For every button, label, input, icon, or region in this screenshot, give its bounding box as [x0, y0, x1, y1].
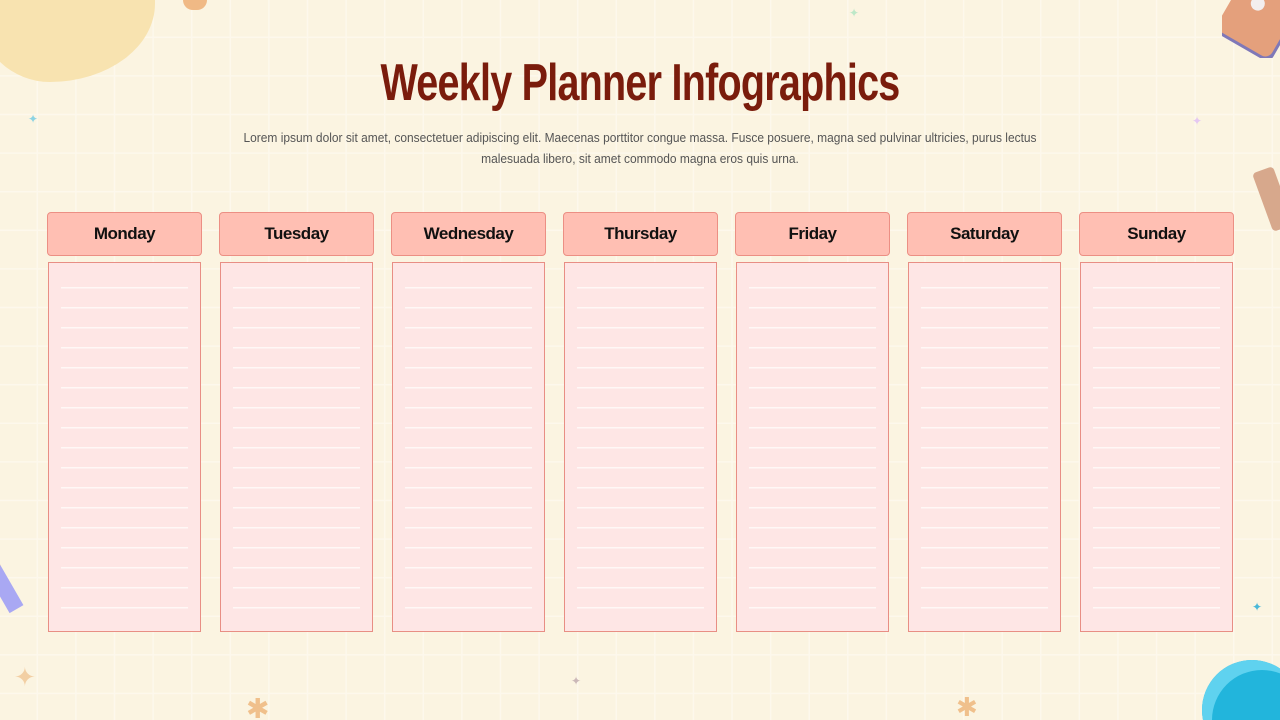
- icon: blue ball bottom-right: [1202, 660, 1280, 720]
- text: ✦: [849, 6, 859, 20]
- title: Weekly Planner Infographics: [380, 54, 900, 112]
- column: Sunday: [1079, 212, 1234, 632]
- subtitle text: malesuada libero, sit amet commodo magna eros quis urna.: [481, 151, 799, 166]
- column: Thursday: [563, 212, 718, 632]
- text: ✦: [571, 674, 581, 688]
- decoration: torn paper top-left: [0, 0, 155, 82]
- column: Tuesday: Tuesday: [264, 224, 329, 243]
- column: Tuesday: [219, 212, 374, 632]
- icon: notebook top-right: [1222, 0, 1280, 58]
- text: ✦: [1192, 114, 1202, 128]
- column: Friday: [735, 212, 890, 632]
- icon: pencil left: [0, 555, 23, 613]
- subtitle text: Lorem ipsum dolor sit amet, consectetuer adipiscing elit. Maecenas porttitor congue massa. Fusce posuere, magna sed pulvinar ultricies, purus lectus: [243, 130, 1037, 145]
- column: Monday: [47, 212, 202, 632]
- text: ✦: [1252, 600, 1262, 614]
- icon: cookie top: [183, 0, 207, 10]
- icon: star cookies bottom: ✦: [14, 662, 36, 692]
- icon: sparkles: ✦: [28, 112, 38, 126]
- column: Friday: Friday: [788, 224, 837, 243]
- column: Saturday: [907, 212, 1062, 632]
- column: Saturday: Saturday: [950, 224, 1019, 243]
- column: Thursday: Thursday: [604, 224, 677, 243]
- column: Monday: Monday: [94, 224, 155, 243]
- icon: ruler right: [1252, 166, 1280, 232]
- subtitle text: [243, 130, 1037, 166]
- column: Sunday: Sunday: [1127, 224, 1186, 243]
- column: Wednesday: Wednesday: [424, 224, 513, 243]
- column: Wednesday: [391, 212, 546, 632]
